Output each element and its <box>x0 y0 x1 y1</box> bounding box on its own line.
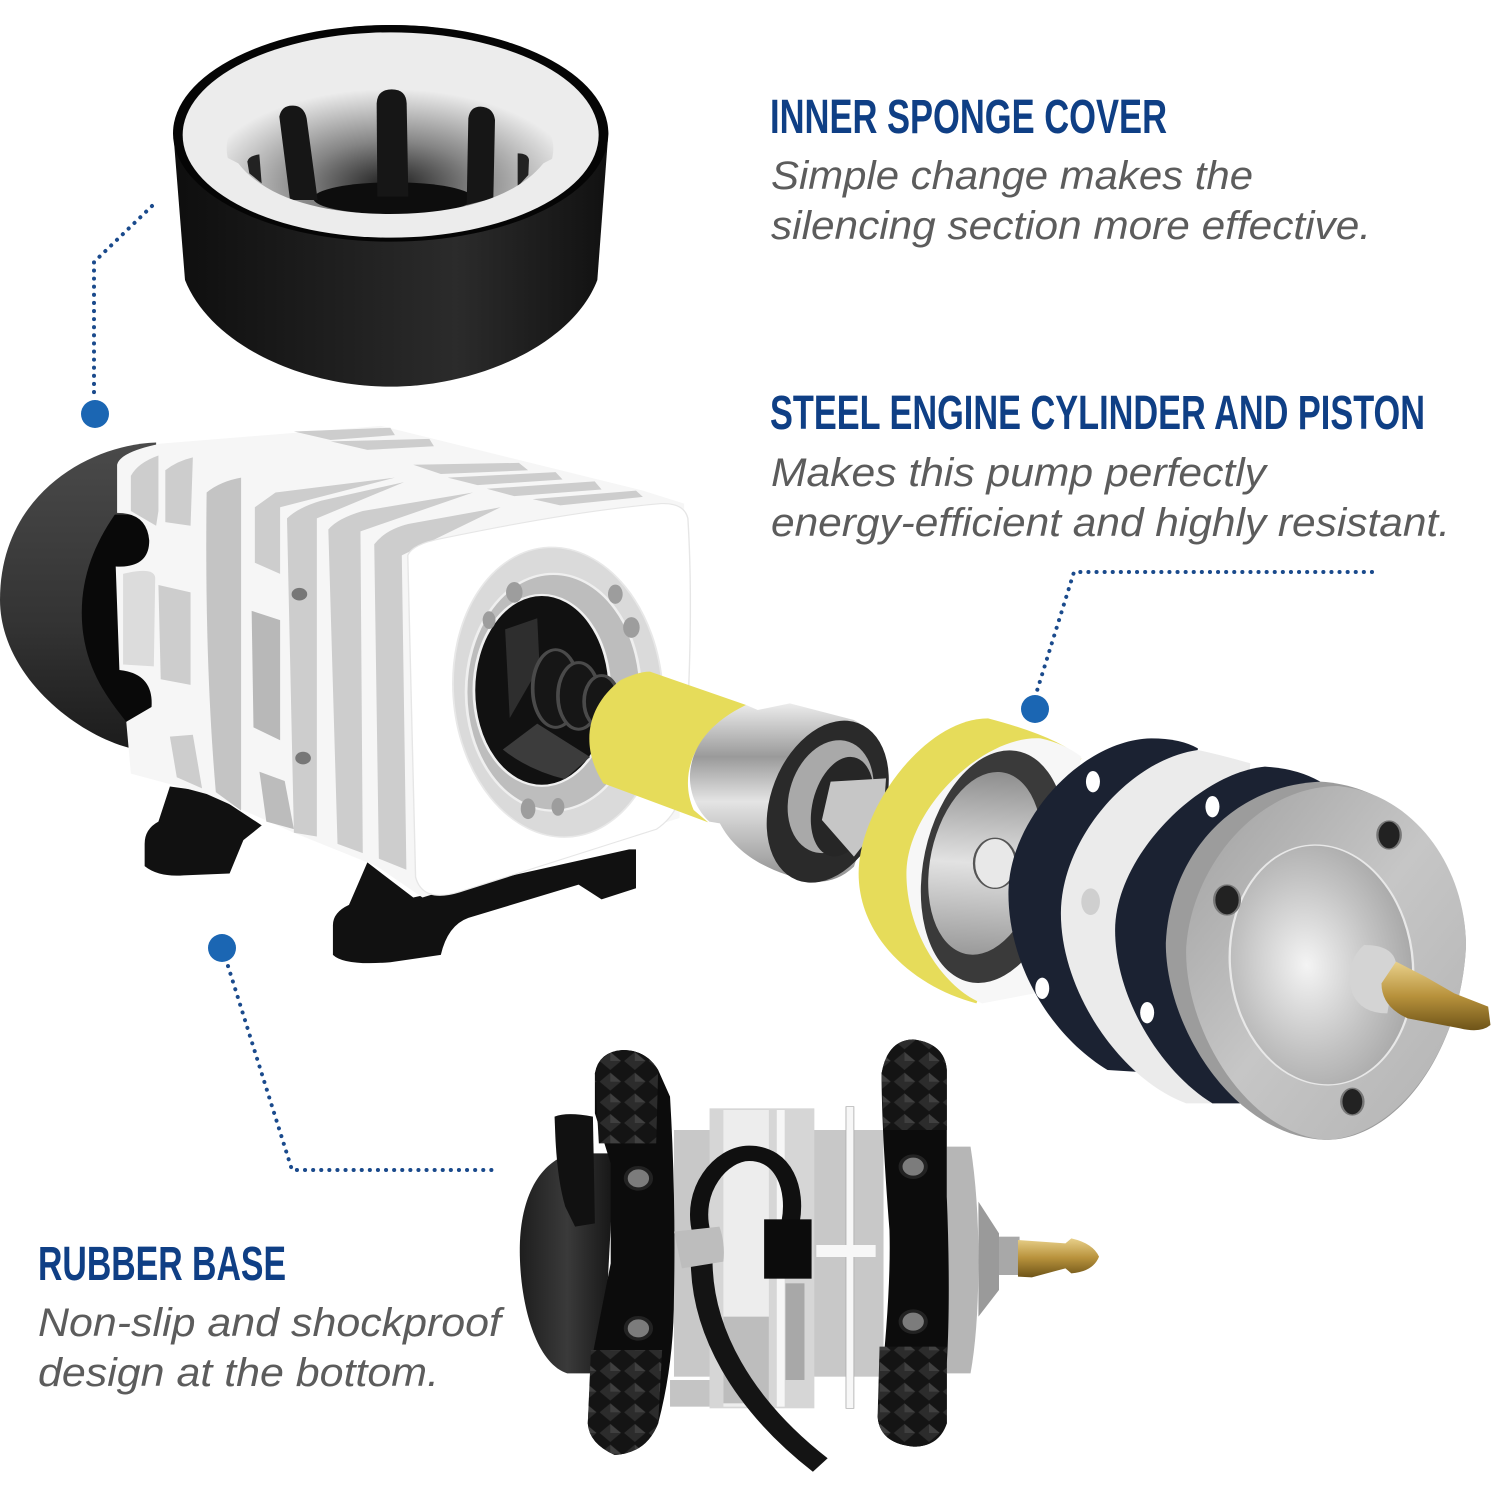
white spacer <box>1061 750 1250 1103</box>
brass fitting <box>1018 1238 1099 1277</box>
text: sponge cover description: Simple change makes the <box>771 154 1253 198</box>
icon: pump main body <box>0 426 690 963</box>
icon: exploded cylinder, piston and head <box>589 672 1490 1140</box>
icon: pump bottom view <box>520 1039 1099 1465</box>
text: cylinder description: Makes this pump perfectly <box>771 451 1269 495</box>
right rubber foot <box>878 1039 949 1447</box>
icon: inner sponge cover <box>173 25 608 387</box>
heading: inner sponge cover: INNER SPONGE COVER <box>770 91 1167 144</box>
text: cylinder description: energy-efficient and highly resistant. <box>771 501 1450 545</box>
marker: rubber base <box>208 934 236 962</box>
text: rubber base description: Non-slip and shockproof <box>38 1301 505 1345</box>
front gasket <box>1115 767 1320 1103</box>
rear gasket <box>1008 738 1198 1073</box>
power cable <box>699 1153 792 1233</box>
callout line: sponge cover <box>94 206 152 398</box>
piston <box>690 703 885 882</box>
nozzle base <box>1350 945 1396 1013</box>
callout line: cylinder <box>1036 572 1372 694</box>
yellow cylinder sleeve <box>589 672 746 822</box>
motor <box>520 1153 615 1373</box>
front plate <box>408 504 690 895</box>
marker: cylinder <box>1021 695 1049 723</box>
brass nozzle <box>1381 962 1490 1030</box>
marker: sponge cover <box>81 400 109 428</box>
text: rubber base description: design at the bottom. <box>38 1351 439 1395</box>
heading: rubber base: RUBBER BASE <box>38 1238 286 1291</box>
fins <box>674 1130 884 1377</box>
callout line: rubber base <box>228 966 498 1170</box>
yellow piston ring <box>859 718 1081 1003</box>
cylinder head <box>1166 782 1466 1140</box>
left rubber foot <box>588 1050 674 1455</box>
flange <box>444 543 672 841</box>
text: sponge cover description: silencing section more effective. <box>771 204 1371 248</box>
